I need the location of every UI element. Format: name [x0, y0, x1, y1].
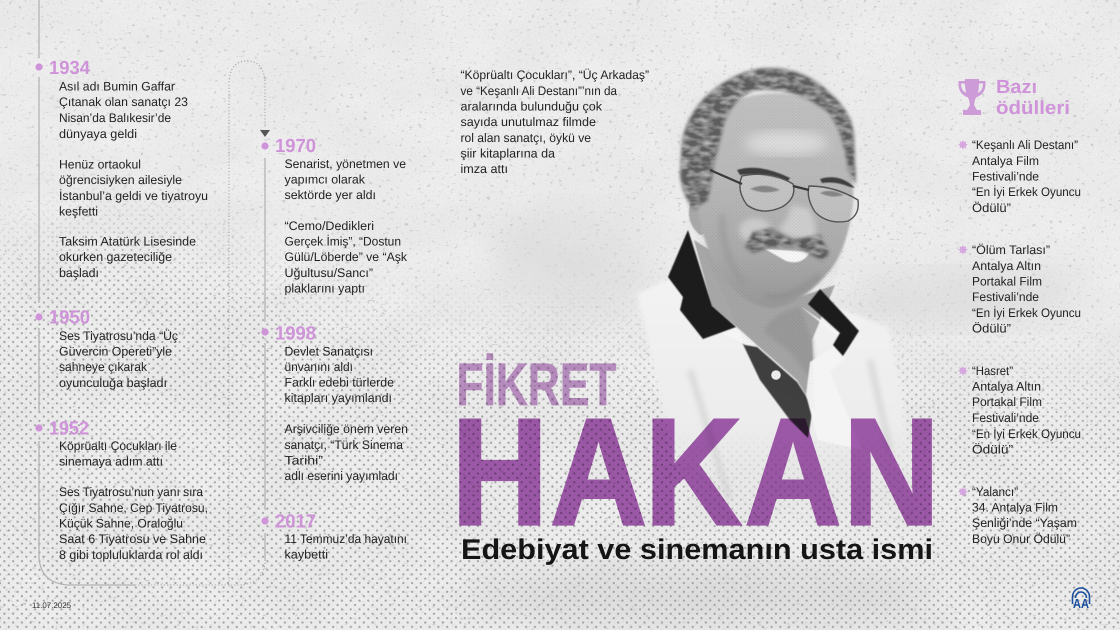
timeline entry 1950: Güvercin Opereti”yle — [59, 344, 172, 358]
halftone dot overlay — [0, 184, 1120, 628]
timeline entry 1952: 8 gibi topluluklarda rol aldı — [59, 548, 203, 562]
timeline entry 1952 — [35, 418, 208, 562]
award 3: “Hasret” — [972, 364, 1013, 378]
timeline entry 1970: Uğultusu/Sancı” — [284, 266, 373, 280]
timeline entry 1934: okurken gazeteciliğe — [59, 250, 172, 264]
award 3: Portakal Film — [972, 395, 1042, 409]
timeline entry 1934: 1934 — [49, 58, 90, 79]
timeline entry 1998 — [261, 324, 408, 483]
fine screen over photo — [682, 68, 856, 410]
award 4: ✸ — [958, 484, 969, 500]
button — [771, 370, 781, 380]
timeline entry 1998: adlı eserini yayımladı — [284, 469, 398, 483]
dark collar left — [668, 230, 736, 339]
intro text block: aralarında bulunduğu çok — [460, 100, 603, 114]
timeline entry 1952: 1952 — [49, 418, 89, 440]
award 3: “En İyi Erkek Oyuncu — [972, 427, 1081, 441]
award 4: Boyu Onur Ödülü” — [972, 532, 1070, 546]
intro text block — [460, 68, 649, 176]
timeline entry 1934: keşfetti — [59, 204, 98, 218]
eyebrows — [737, 168, 790, 181]
award 2: Portakal Film — [972, 274, 1042, 288]
timeline entry 1998: sanatçı, “Türk Sinema — [284, 438, 403, 452]
timeline entry 1970: yapımcı olarak — [284, 172, 366, 186]
award 3: Antalya Altın — [972, 380, 1041, 394]
timeline entry 1998: kitapları yayımlandı — [284, 391, 392, 405]
award 1: Antalya Film — [972, 154, 1039, 168]
timeline entry 1934: Taksim Atatürk Lisesinde — [59, 234, 196, 248]
glasses — [710, 170, 858, 222]
timeline entry 1952: Çığır Sahne, Cep Tiyatrosu, — [59, 501, 208, 515]
neck — [694, 240, 835, 410]
award 1: Ödülü” — [972, 201, 1011, 215]
white open collar — [716, 327, 757, 347]
nose — [778, 205, 816, 239]
mustache — [745, 228, 829, 261]
timeline entry 1934: dünyaya geldi — [59, 127, 137, 141]
award 1: “Keşanlı Ali Destanı” — [972, 138, 1078, 152]
timeline entry 1934: Çıtanak olan sanatçı 23 — [59, 95, 188, 109]
face shading — [722, 215, 820, 297]
intro text block: “Köprüaltı Çocukları”, “Üç Arkadaş” — [460, 68, 649, 82]
timeline entry 1998: Arşivciliğe önem veren — [284, 422, 408, 436]
timeline entry 1950: 1950 — [49, 308, 90, 328]
award 3: ✸ — [958, 364, 969, 378]
timeline entry 1998: Devlet Sanatçısı — [284, 344, 373, 358]
timeline entry 2017: 2017 — [275, 512, 316, 532]
award 2: ✸ — [958, 242, 969, 258]
timeline lines — [39, 0, 270, 585]
eyes — [750, 186, 780, 192]
hair — [680, 68, 856, 210]
award 2: “Ölüm Tarlası” — [972, 243, 1050, 257]
timeline entry 1950: sahneye çıkarak — [59, 360, 148, 374]
awards heading with trophy icon — [958, 77, 1070, 119]
timeline entry 1998: Tarihi” — [284, 454, 323, 468]
award 2: Antalya Altın — [972, 259, 1041, 273]
timeline entry 1970 — [261, 136, 408, 296]
intro text block: şiir kitaplarına da — [460, 146, 555, 160]
timeline entry 1970: “Cemo/Dedikleri — [284, 219, 374, 233]
award 1: ✸ — [958, 138, 969, 152]
icon: trophy — [958, 79, 986, 115]
award 1: “En İyi Erkek Oyuncu — [972, 185, 1081, 199]
arrow head — [260, 130, 270, 137]
title — [452, 351, 939, 566]
award 2: “En İyi Erkek Oyuncu — [972, 306, 1081, 320]
surname: HAKAN — [452, 387, 939, 556]
icon: AA logo — [1072, 588, 1090, 611]
timeline entry 1952: Saat 6 Tiyatrosu ve Sahne — [59, 532, 206, 546]
intro text block: imza attı — [460, 162, 508, 176]
timeline entry 1934: İstanbul’a geldi ve tiyatroyu — [59, 189, 208, 203]
timeline entry 1934: Asıl adı Bumin Gaffar — [59, 80, 175, 94]
timeline entry 1952: Ses Tiyatrosu’nun yanı sıra — [59, 485, 203, 499]
date: 11.07.2025 — [32, 601, 72, 610]
first name: FİKRET — [456, 351, 616, 418]
portrait photo of Fikret Hakan — [637, 68, 918, 530]
award 4: 34. Antalya Film — [972, 500, 1058, 514]
timeline entry 1934 — [35, 58, 208, 280]
timeline entry 1950: Ses Tiyatrosu’nda “Üç — [59, 329, 178, 343]
awards heading with trophy icon: Bazı — [996, 77, 1037, 98]
timeline entry 1998: ünvanını aldı — [284, 360, 353, 374]
timeline entry 1950: oyunculuğa başladı — [59, 376, 167, 390]
timeline entry 1934: başladı — [59, 266, 99, 280]
award 3: Festivali’nde — [972, 411, 1039, 425]
intro text block: sayıda unutulmaz filmde — [460, 115, 596, 129]
timeline entry 1998: 1998 — [275, 324, 316, 344]
timeline entry 1952: sinemaya adım attı — [59, 454, 163, 468]
teeth — [765, 249, 810, 262]
subtitle: Edebiyat ve sinemanın usta ismi — [461, 534, 933, 566]
timeline entry 1950 — [35, 308, 178, 390]
timeline entry 1934: Henüz ortaokul — [59, 158, 141, 172]
award 3 — [958, 364, 1081, 456]
award 3: Ödülü” — [972, 442, 1013, 456]
timeline entry 1970: plaklarını yaptı — [284, 282, 365, 296]
award 4: “Yalancı” — [972, 485, 1018, 499]
intro text block: ve “Keşanlı Ali Destanı”’nın da — [460, 84, 617, 98]
timeline entry 1970: Senarist, yönetmen ve — [284, 157, 406, 171]
ear — [689, 198, 708, 235]
timeline entry 2017: 11 Temmuz’da hayatını — [284, 532, 407, 546]
icon: AA logo: AA — [1073, 596, 1090, 611]
timeline entry 2017: kaybetti — [284, 548, 328, 562]
timeline entry 1970: 1970 — [275, 136, 316, 157]
award 4: Şenliği’nde “Yaşam — [972, 516, 1077, 530]
forehead highlight — [744, 131, 828, 155]
timeline entry 1952: Küçük Sahne, Oraloğlu — [59, 516, 183, 530]
face — [695, 93, 853, 308]
award 2: Ödülü” — [972, 322, 1011, 336]
award 4 — [958, 484, 1077, 546]
timeline entry 2017 — [261, 512, 407, 562]
dark placket — [741, 340, 813, 438]
award 2: Festivali’nde — [972, 290, 1039, 304]
intro text block: rol alan sanatçı, öykü ve — [460, 131, 591, 145]
timeline entry 1970: Gerçek İmiş”, “Dostun — [284, 234, 401, 248]
award 1 — [958, 138, 1081, 215]
timeline entry 1970: sektörde yer aldı — [284, 188, 376, 202]
shirt — [637, 278, 918, 530]
dark collar right — [808, 289, 859, 356]
timeline entry 1970: Gülü/Löberde” ve “Aşk — [284, 250, 408, 264]
timeline entry 1934: Nisan’da Balıkesir’de — [59, 111, 171, 125]
timeline entry 1934: öğrencisiyken ailesiyle — [59, 173, 182, 187]
timeline entry 1998: Farklı edebi türlerde — [284, 376, 394, 390]
timeline entry 1952: Köprüaltı Çocukları ile — [59, 439, 177, 453]
award 1: Festivali’nde — [972, 170, 1039, 184]
awards heading with trophy icon: ödülleri — [996, 98, 1070, 119]
award 2 — [958, 242, 1081, 336]
